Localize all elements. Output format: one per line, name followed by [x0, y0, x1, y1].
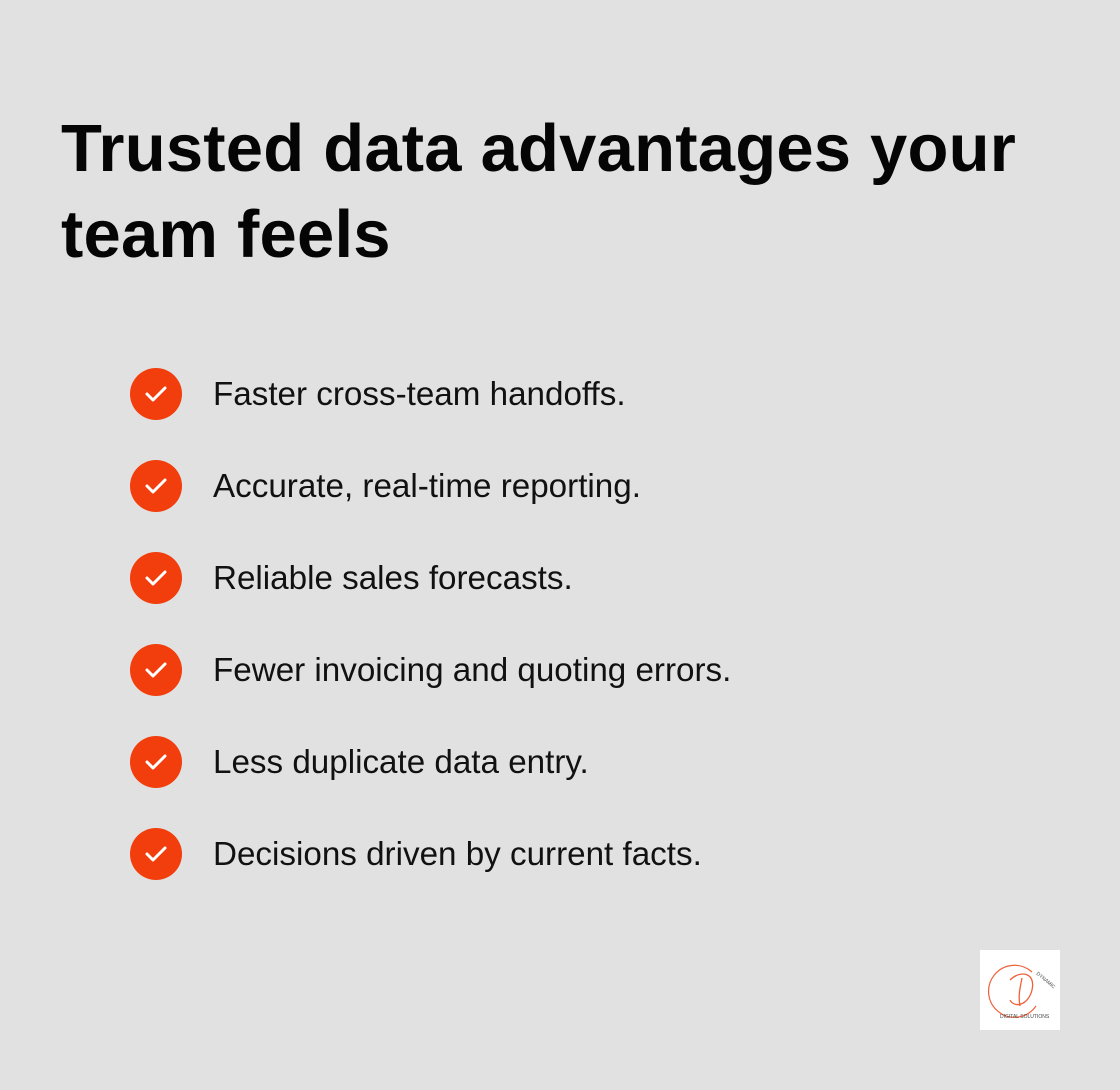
list item 4	[130, 644, 731, 696]
logo	[980, 950, 1060, 1030]
list item 3: Reliable sales forecasts.	[213, 560, 573, 597]
logo: DIGITAL SOLUTIONS	[1000, 1014, 1050, 1020]
title	[61, 111, 1016, 272]
icon: check	[130, 552, 182, 604]
icon: check	[130, 828, 182, 880]
list item 2	[130, 460, 641, 512]
icon: check	[130, 644, 182, 696]
list item 6: Decisions driven by current facts.	[213, 836, 702, 873]
list item 2: Accurate, real-time reporting.	[213, 468, 641, 505]
icon: check	[130, 368, 182, 420]
list item 5	[130, 736, 589, 788]
list item 3	[130, 552, 573, 604]
icon: check	[130, 736, 182, 788]
title: team feels	[61, 197, 391, 272]
list item 6	[130, 828, 702, 880]
list item 1: Faster cross-team handoffs.	[213, 376, 626, 413]
logo: DYNAMIC	[1035, 971, 1057, 991]
icon: check	[130, 460, 182, 512]
list item 1	[130, 368, 626, 420]
list item 5: Less duplicate data entry.	[213, 744, 589, 781]
list item 4: Fewer invoicing and quoting errors.	[213, 652, 731, 689]
title: Trusted data advantages your	[61, 111, 1016, 186]
